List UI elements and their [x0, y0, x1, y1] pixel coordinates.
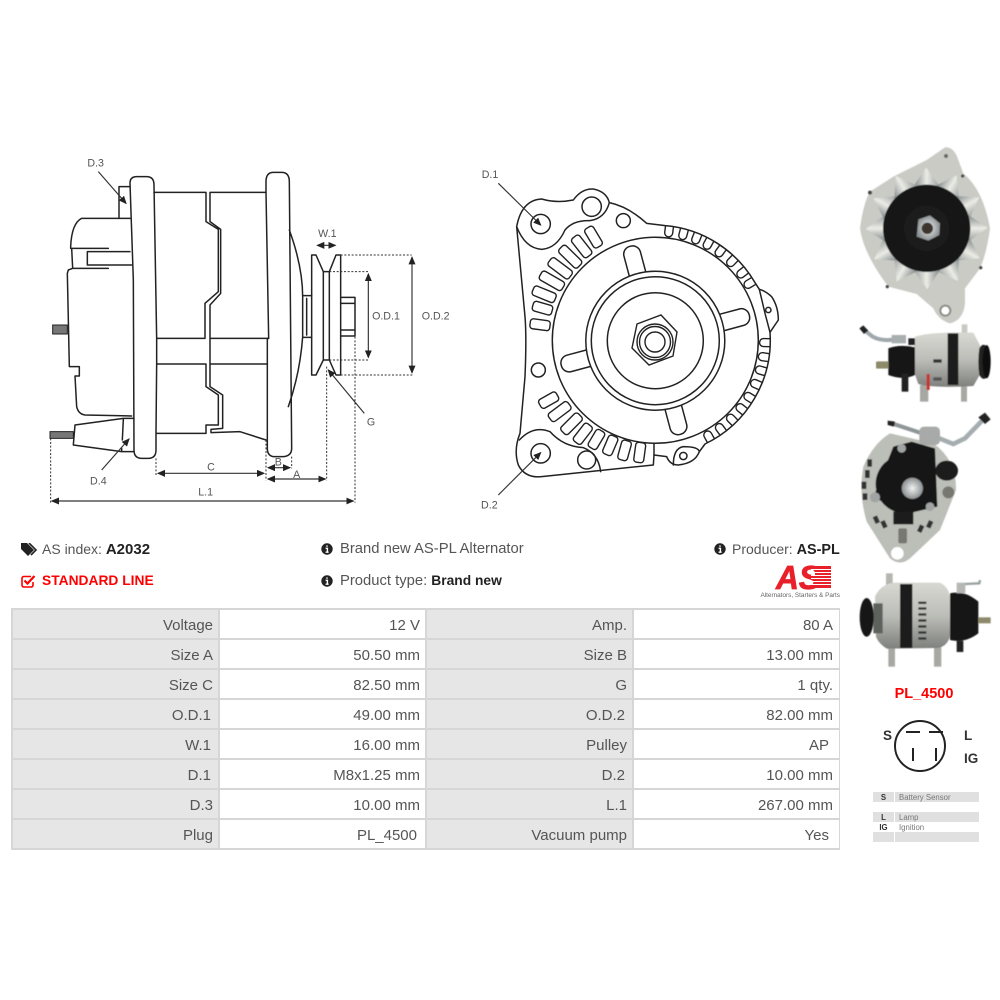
specification table: Plug [183, 827, 213, 844]
connector circle [895, 721, 945, 771]
front dome [288, 230, 303, 407]
dimension W.1: W.1 [318, 228, 337, 240]
D.2 callout [481, 453, 541, 511]
pulley rings [586, 271, 725, 410]
pin label IG: IG [964, 751, 978, 766]
specification table: Size C [169, 677, 213, 694]
callout G: G [367, 417, 375, 429]
legend row S: S [881, 793, 886, 802]
right lug [654, 289, 770, 465]
plug title: PL_4500 [895, 686, 953, 702]
D.4 terminal [73, 418, 134, 452]
icon: info [714, 543, 726, 555]
specification table: Pulley [586, 737, 627, 754]
housing outline [516, 189, 778, 477]
specification table: 10.00 mm [353, 797, 420, 814]
dimension O.D.1 [329, 272, 400, 360]
front view technical drawing [481, 169, 778, 511]
D.3 mounting lug [119, 187, 130, 218]
specification table: 267.00 mm [758, 797, 833, 814]
dimension B [268, 456, 290, 468]
photo: alternator side with vacuum pump [859, 324, 991, 402]
logo caption: Alternators, Starters & Parts [760, 592, 840, 599]
callout D.4: D.4 [90, 475, 107, 487]
rear housing flange [130, 177, 157, 458]
specification table: PL_4500 [357, 827, 417, 844]
legend row IG [879, 823, 924, 832]
dimension O.D.2 [341, 255, 450, 375]
pulley [312, 255, 341, 375]
standard line badge: STANDARD LINE [42, 573, 154, 588]
pulley nut [341, 297, 355, 336]
product type: Product type: Brand new [340, 573, 502, 589]
pins [906, 732, 943, 761]
small U slots bottom right [702, 338, 770, 443]
specification table: 12 V [389, 617, 420, 634]
specification table: 80 A [803, 617, 833, 634]
icon: check box [21, 575, 36, 588]
top mounting ear [517, 203, 609, 249]
specification table [11, 608, 840, 850]
left ventilation slots top [529, 225, 603, 331]
shaft collar [303, 296, 312, 337]
specification table: D.2 [602, 767, 625, 784]
specification table: 50.50 mm [353, 647, 420, 664]
specification table: D.3 [190, 797, 213, 814]
specification table: 10.00 mm [766, 767, 833, 784]
callout D.3: D.3 [87, 157, 104, 169]
description: Brand new AS-PL Alternator [340, 541, 524, 557]
pin label S: S [883, 728, 892, 743]
terminal stud [50, 432, 73, 438]
pin label L: L [964, 728, 972, 743]
icon: info [321, 575, 333, 587]
legend row L: Lamp [899, 813, 919, 822]
bottom mounting ear [519, 430, 601, 472]
specification table: W.1 [185, 737, 211, 754]
legend empty row [873, 832, 979, 842]
dimension O.D.1: O.D.1 [372, 310, 400, 322]
left ventilation slots bottom [537, 391, 646, 463]
dimension C: C [207, 461, 215, 473]
specification table: Size A [170, 647, 213, 664]
specification table: L.1 [606, 797, 627, 814]
photo: alternator opposite side [860, 573, 991, 667]
plug pin diagram [895, 721, 945, 771]
specification table: O.D.1 [172, 707, 211, 724]
legend row IG: Ignition [899, 823, 924, 832]
photo: alternator rear with vacuum pump [861, 413, 991, 562]
specification table: G [615, 677, 627, 694]
hex nut [632, 315, 677, 365]
specification table: O.D.2 [586, 707, 625, 724]
D.2 callout: D.2 [481, 499, 498, 511]
dimension W.1 [317, 228, 337, 245]
pin legend [873, 792, 979, 842]
legend row IG: IG [879, 823, 888, 832]
AS-PL logo [760, 562, 840, 599]
dimension L.1: L.1 [198, 486, 213, 498]
specification table: Amp. [592, 617, 627, 634]
dashed extension lines [51, 337, 355, 503]
rear cover [67, 218, 132, 416]
dimension B: B [275, 456, 282, 468]
dimension C [158, 461, 264, 473]
side view technical drawing [50, 157, 450, 503]
specification table: M8x1.25 mm [333, 767, 420, 784]
dimension A [268, 469, 325, 481]
dimension O.D.2: O.D.2 [422, 310, 450, 322]
specification table: 49.00 mm [353, 707, 420, 724]
icon: info [321, 543, 333, 555]
specification table: 82.50 mm [353, 677, 420, 694]
D.1 callout: D.1 [482, 169, 498, 181]
icon: tags [21, 543, 37, 556]
specification table: 13.00 mm [766, 647, 833, 664]
legend row S: Battery Sensor [899, 793, 951, 802]
callout D.3 [87, 157, 126, 203]
spokes [559, 244, 751, 436]
specification table: Size B [584, 647, 627, 664]
legend row L: L [881, 813, 886, 822]
specification table: AP [809, 737, 829, 754]
specification table: Voltage [163, 617, 213, 634]
specification table: D.1 [188, 767, 211, 784]
mounting holes [531, 197, 771, 469]
dimension A: A [293, 469, 301, 481]
producer: Producer: AS-PL [732, 541, 840, 558]
legend row L [873, 812, 979, 822]
legend row S [873, 792, 979, 802]
callout G [328, 370, 375, 429]
rear stud [53, 325, 67, 334]
specification table: 1 qty. [797, 677, 833, 694]
rotor disc [552, 237, 758, 443]
stator body lines [154, 192, 269, 440]
callout D.4 [90, 439, 129, 487]
specification table: 16.00 mm [353, 737, 420, 754]
AS index: AS index: A2032 [42, 541, 150, 558]
specification table: Yes [805, 827, 829, 844]
small U slots top right [664, 226, 756, 290]
D.1 callout [482, 169, 541, 225]
front housing flange [266, 172, 292, 457]
specification table: Vacuum pump [531, 827, 627, 844]
specification table: 82.00 mm [766, 707, 833, 724]
photo: alternator front [860, 147, 990, 323]
